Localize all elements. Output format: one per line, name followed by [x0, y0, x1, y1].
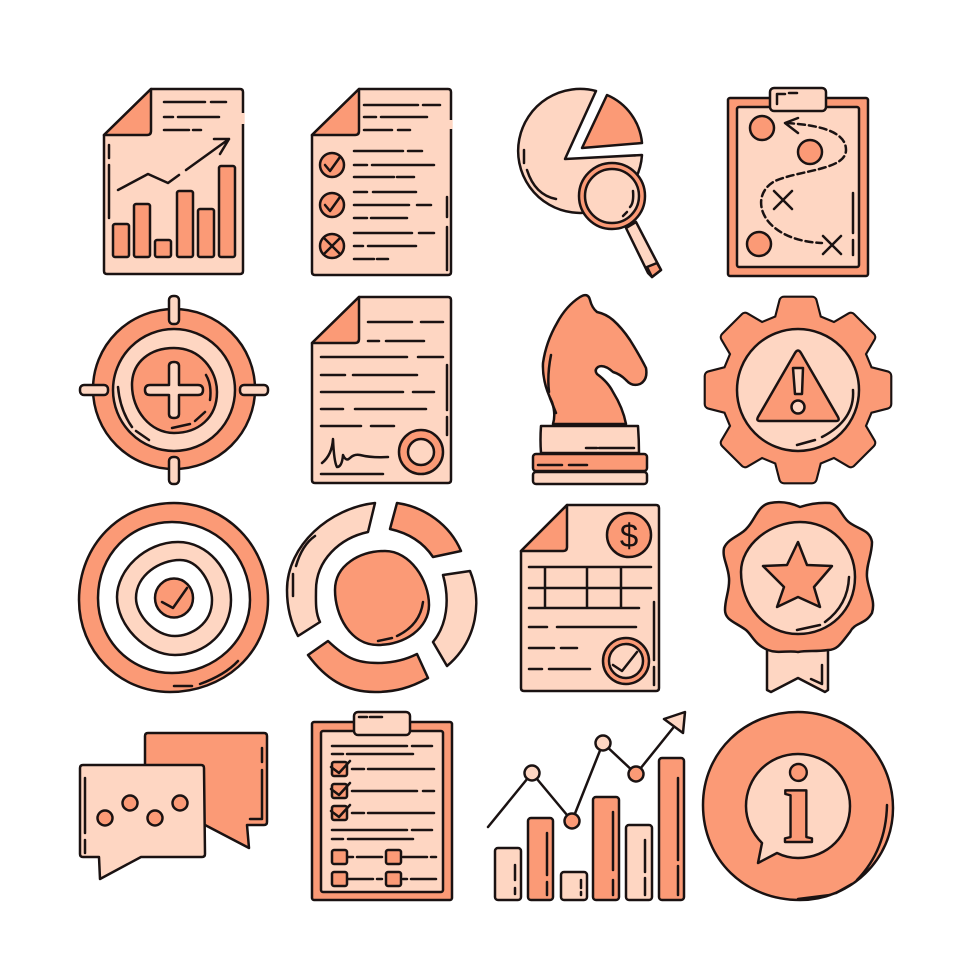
icon: strategy clipboard [728, 88, 868, 276]
data points [524, 736, 644, 828]
icon: pie chart with magnifier [518, 89, 661, 277]
arrow head [664, 712, 685, 733]
scalloped seal [724, 502, 873, 652]
icon: speech bubbles [80, 733, 267, 879]
route arrow head and crosses [774, 118, 853, 255]
approval stamp [603, 638, 649, 684]
seal [399, 430, 443, 474]
plus sign [145, 362, 203, 418]
bar chart [113, 166, 235, 257]
icon: invoice document [521, 505, 659, 691]
empty boxes [332, 850, 401, 886]
icon: task clipboard [312, 712, 452, 900]
checked boxes [331, 761, 350, 820]
icon: chess knight [533, 295, 647, 484]
letter i: i [782, 743, 814, 867]
ribbon [767, 648, 828, 692]
dollar coin [607, 513, 651, 557]
icon: report document with bar chart [104, 89, 243, 274]
bars [495, 758, 684, 900]
dollar coin: $ [620, 517, 638, 554]
play markers [747, 116, 822, 256]
icon: gear with warning [709, 301, 887, 479]
exclamation mark [792, 368, 804, 414]
check marks and cross [320, 153, 344, 258]
icon: segmented ring chart [287, 503, 476, 692]
icon: crosshair target with plus [80, 296, 268, 484]
dashed route [761, 123, 846, 243]
trend arrow [118, 139, 229, 190]
icon: signed contract [312, 297, 451, 483]
icon: concentric target [79, 503, 268, 692]
icon: checklist document [312, 89, 451, 275]
crosshair ticks [80, 296, 268, 484]
speech bubble [746, 754, 850, 863]
star [763, 542, 832, 607]
signature [322, 439, 388, 467]
magnifier [579, 163, 661, 277]
icon: information bubble [703, 712, 893, 900]
warning triangle [757, 350, 839, 421]
knight base [533, 426, 647, 484]
icon: award badge with star [724, 502, 873, 692]
typing dots [98, 796, 188, 826]
trend line [488, 728, 673, 827]
icon: growth bar chart [488, 712, 685, 900]
